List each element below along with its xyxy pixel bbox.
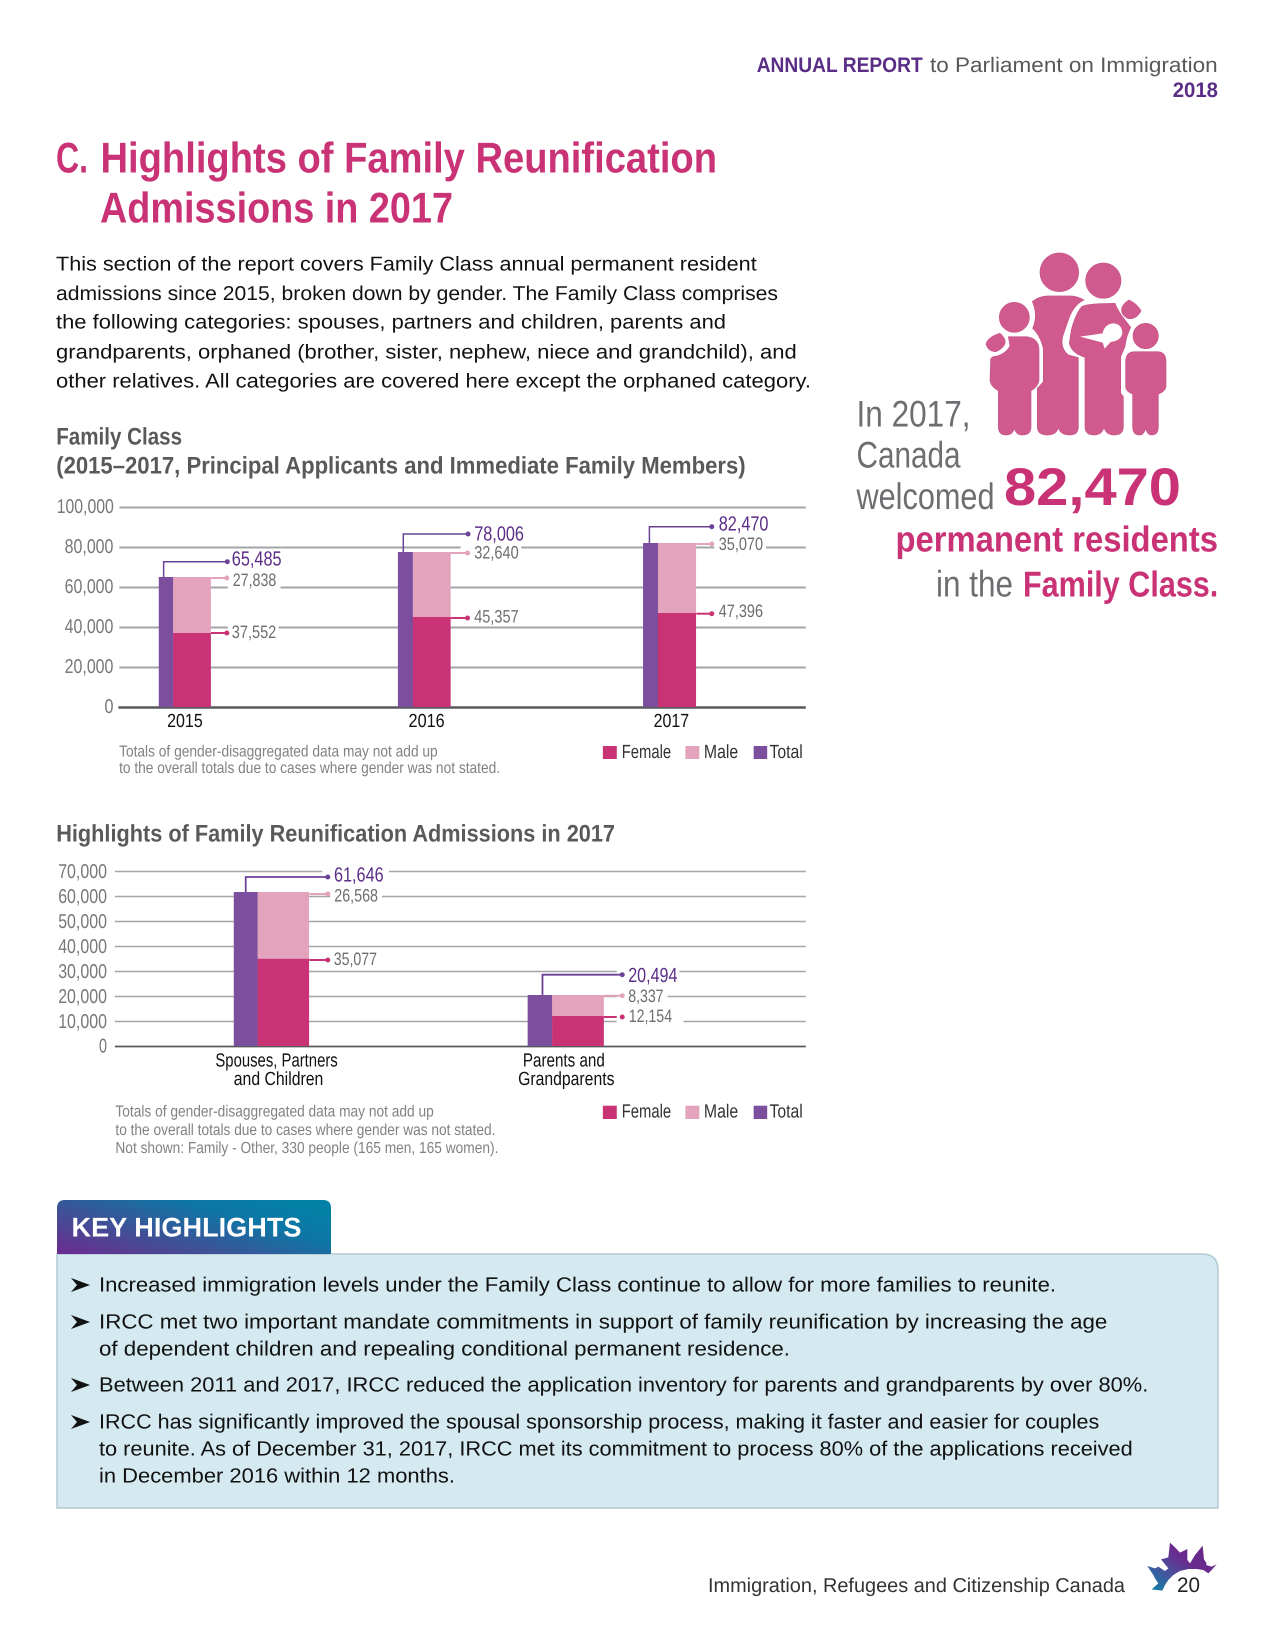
bars 2016: 45,357 (474, 607, 519, 627)
heading: Family Class chart (56, 423, 746, 479)
legend: Family Class chart: Male (704, 742, 738, 763)
y axis labels: 0 (104, 696, 113, 718)
y axis labels: 100,000 (57, 496, 114, 518)
callout: 82,470 permanent residents: Canada (856, 435, 961, 476)
bars 2016 (398, 523, 524, 732)
tab: key highlights heading (57, 1200, 331, 1254)
legend: Family Class chart: Female (622, 742, 671, 763)
legend: admissions chart: Male (704, 1102, 738, 1123)
y axis labels (58, 861, 107, 1058)
tab: key highlights heading: KEY HIGHLIGHTS (72, 1213, 302, 1243)
panel background (57, 1254, 1218, 1508)
bullet text: IRCC has significantly improved the spousal sponsorship process, making it faster and easier for couples (99, 1410, 1099, 1433)
legend: Family Class chart: Total (769, 742, 803, 763)
callout: 82,470 permanent residents: welcomed (856, 476, 994, 517)
y axis labels: 30,000 (58, 961, 107, 983)
bullet text: Increased immigration levels under the Family Class continue to allow for more families to reunite. (99, 1273, 1056, 1296)
intro paragraph: grandparents, orphaned (brother, sister, nephew, niece and grandchild), and (56, 341, 797, 363)
bars: parents and grandparents: Parents and (523, 1051, 605, 1072)
bar chart: Family Class 2015-2017 (57, 496, 806, 732)
bars: spouses, partners and children: Spouses, Partners (215, 1051, 338, 1072)
heading: Family Class chart: (2015–2017, Principal Applicants and Immediate Family Members) (56, 452, 746, 479)
callout: 82,470 permanent residents (856, 394, 1218, 605)
bars: spouses, partners and children: 35,077 (334, 949, 377, 969)
callout: 82,470 permanent residents: in the (936, 564, 1013, 605)
y axis labels: 40,000 (65, 616, 113, 638)
y axis labels: 70,000 (58, 861, 107, 883)
y axis labels: 60,000 (58, 886, 107, 908)
intro paragraph (56, 254, 811, 393)
chart note: admissions: Totals of gender-disaggregated data may not add up (115, 1104, 434, 1121)
intro paragraph: other relatives. All categories are covered here except the orphaned category. (56, 371, 811, 393)
bars 2015: 37,552 (232, 622, 276, 642)
bars: spouses, partners and children (215, 864, 384, 1090)
chart note: Family Class: to the overall totals due to cases where gender was not stated. (119, 760, 500, 777)
callout: 82,470 permanent residents: In 2017, (856, 394, 970, 435)
title: Highlights of Family Reunification (100, 135, 717, 183)
chart note: admissions: to the overall totals due to cases where gender was not stated. (115, 1122, 495, 1139)
y axis labels: 0 (99, 1036, 107, 1058)
bullet text: IRCC met two important mandate commitments in support of family reunification by increasing the age (99, 1310, 1107, 1333)
report header: 2018 (1173, 79, 1218, 102)
callout: 82,470 permanent residents: Family Class. (1023, 564, 1218, 605)
y axis labels: 60,000 (65, 576, 113, 598)
bars 2016: 2016 (409, 711, 445, 732)
legend: admissions chart (603, 1102, 803, 1123)
chart note: admissions: Not shown: Family - Other, 330 people (165 men, 165 women). (115, 1140, 498, 1157)
bars 2015 (159, 548, 282, 732)
footer text: Immigration, Refugees and Citizenship Canada (708, 1575, 1126, 1597)
bars 2016: 78,006 (474, 523, 524, 546)
heading: Family Class chart: Family Class (56, 423, 182, 450)
y axis labels: 20,000 (58, 986, 107, 1008)
bars: spouses, partners and children: 26,568 (334, 886, 378, 906)
bars 2017: 35,070 (719, 534, 763, 554)
callout: 82,470 permanent residents: permanent residents (896, 518, 1218, 560)
y axis labels: 40,000 (58, 936, 107, 958)
bar chart: Highlights of admissions in 2017 (58, 861, 806, 1090)
chart note: Family Class: Totals of gender-disaggregated data may not add up (119, 744, 438, 761)
intro paragraph: admissions since 2015, broken down by gender. The Family Class comprises (56, 283, 778, 305)
bullet text: to reunite. As of December 31, 2017, IRCC met its commitment to process 80% of the applications received (99, 1438, 1133, 1461)
legend: admissions chart: Female (622, 1102, 671, 1123)
bars 2015: 2015 (167, 711, 203, 732)
bars 2015: 65,485 (232, 548, 282, 571)
title: C. (56, 135, 88, 183)
report header: ANNUAL REPORT (757, 54, 923, 77)
bullet text: Between 2011 and 2017, IRCC reduced the application inventory for parents and grandparents by over 80%. (99, 1373, 1148, 1396)
bars: spouses, partners and children: and Children (234, 1069, 323, 1090)
icon: maple leaf (1147, 1543, 1217, 1591)
bullet text (99, 1273, 1148, 1487)
chart note: Family Class (119, 744, 500, 777)
report header (757, 54, 1218, 102)
y axis labels: 50,000 (58, 911, 107, 933)
title (56, 135, 717, 232)
bars 2017 (643, 513, 768, 732)
panel: key highlights (57, 1200, 1218, 1508)
bars: spouses, partners and children: 61,646 (334, 864, 384, 887)
bars: parents and grandparents: Grandparents (518, 1069, 614, 1090)
bars: parents and grandparents: 20,494 (628, 964, 677, 987)
chart note: admissions (115, 1104, 498, 1157)
y axis labels: 80,000 (65, 536, 113, 558)
bars 2017: 2017 (654, 711, 689, 732)
intro paragraph: the following categories: spouses, partners and children, parents and (56, 312, 726, 334)
bars: parents and grandparents (518, 964, 677, 1090)
bullet arrows (71, 1278, 90, 1429)
bars 2017: 47,396 (719, 601, 763, 621)
bars: parents and grandparents: 12,154 (629, 1006, 672, 1026)
legend: admissions chart: Total (769, 1102, 803, 1123)
bars: parents and grandparents: 8,337 (628, 986, 664, 1006)
page number: 20 (1177, 1574, 1200, 1597)
heading: admissions chart: Highlights of Family Reunification Admissions in 2017 (56, 820, 615, 848)
bars 2017: 82,470 (719, 513, 768, 536)
bars 2015: 27,838 (233, 570, 276, 590)
callout: 82,470 permanent residents: 82,470 (1004, 458, 1181, 517)
y axis labels: 20,000 (65, 656, 113, 678)
bullet text: in December 2016 within 12 months. (99, 1464, 455, 1487)
title: Admissions in 2017 (100, 184, 453, 232)
y axis labels (57, 496, 114, 718)
intro paragraph: This section of the report covers Family Class annual permanent resident (56, 254, 757, 276)
report header: to Parliament on Immigration (930, 54, 1218, 77)
bars 2016: 32,640 (474, 543, 519, 563)
bullet text: of dependent children and repealing conditional permanent residence. (99, 1338, 790, 1361)
y axis labels: 10,000 (58, 1011, 107, 1033)
legend: Family Class chart (603, 742, 803, 763)
icon: family (986, 253, 1166, 435)
